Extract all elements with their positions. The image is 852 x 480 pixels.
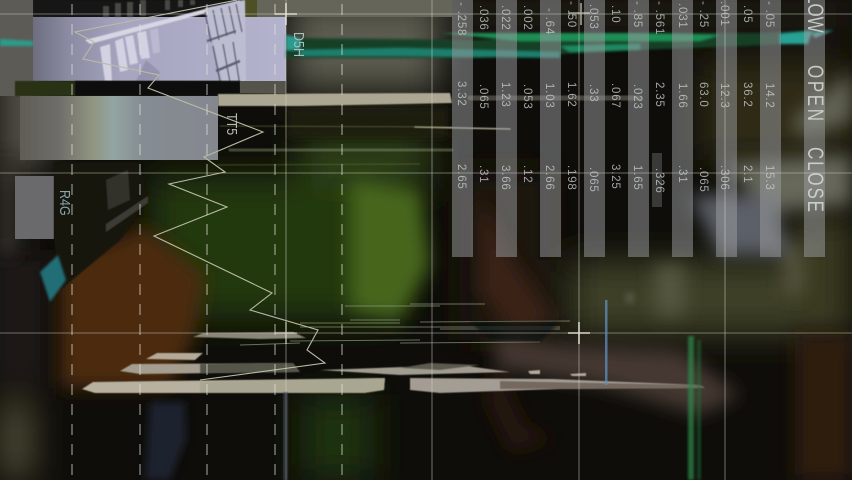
crosshair markers [275,3,590,344]
data table: rotated numeric values: 1.65 [631,165,643,191]
data table: rotated numeric values: 63.0 [697,82,709,108]
panel: small image tile R4G [15,176,54,239]
data table: column headings LOW OPEN CLOSE: CLOSE [802,147,827,212]
data table: rotated numeric values: .12 [521,165,533,183]
data table: rotated numeric values: .306 [718,165,730,191]
data table: rotated numeric values: .05 [741,5,753,23]
data table: rotated numeric values: - .561 [653,1,665,35]
data table: rotated numeric values: .065 [477,84,489,110]
data table: rotated numeric values: - .25 [697,1,709,28]
grid: dashed vertical lines [72,4,342,480]
data table: rotated numeric values: .31 [477,165,489,183]
data table: rotated numeric values: 12.3 [718,83,730,109]
vertical grey-blue streak [283,392,288,480]
beige horizontal bar [218,93,452,106]
data table: rotated numeric values: 36.2 [741,82,753,108]
data table: rotated numeric values: - .85 [631,1,643,28]
dark keyboard fragment [54,162,148,290]
tile label D5H: D5H [291,32,307,57]
data table: rotated numeric values: .053 [587,4,599,30]
data table: rotated numeric values: 14.2 [763,83,775,109]
data table: rotated numeric values: - .258 [455,2,467,36]
data table: rotated numeric values: 3.25 [609,164,621,190]
data table: rotated numeric values: .065 [697,167,709,193]
data table: rotated numeric values: .001 [718,1,730,27]
data table: vertical grey bars [452,0,825,257]
data table: rotated numeric values: 2.1 [741,165,753,183]
data table: rotated numeric values: .053 [521,84,533,110]
data table: rotated numeric values: 1.23 [499,82,511,108]
data table: rotated numeric values: - .05 [763,1,775,28]
data table: rotated numeric values: 2.35 [653,82,665,108]
data table: rotated numeric values: .023 [631,84,643,110]
data table: rotated numeric values: .022 [499,5,511,31]
vertical blue light streak [605,300,608,385]
keyboard slats [85,0,246,92]
dark strip behind streaks [470,322,560,342]
data table: rotated numeric values: .036 [477,5,489,31]
data table: rotated numeric values: - .64 [543,8,555,35]
data table: rotated numeric values: 2.65 [455,164,467,190]
data table: rotated numeric values: 3.66 [499,165,511,191]
vertical green light streaks [688,336,701,480]
tile label T5: TT5 [224,113,240,136]
bottom glitch bars [82,332,705,393]
data table: rotated numeric values: .002 [521,5,533,31]
data table: rotated numeric values: .31 [676,165,688,183]
scan streaks [240,304,570,345]
zigzag line chart [75,0,325,380]
grid: solid vertical lines [286,0,725,480]
data table: rotated numeric values: 1.03 [543,83,555,109]
data table: rotated numeric values: 1.66 [676,83,688,109]
top strip above panels [0,0,452,96]
data table: rotated numeric values: .326 [653,168,665,194]
panel: keyboard image tile D5H [33,0,286,92]
data table: rotated numeric values: .065 [587,167,599,193]
data table: rotated numeric values: - .50 [565,1,577,28]
data table: rotated numeric values: .198 [565,165,577,191]
teal blurred keyboard keys [40,255,66,302]
data table: rotated numeric values: .067 [609,83,621,109]
data table: rotated numeric values: .031 [676,3,688,29]
faint horizontal streaks [218,98,640,165]
panel: blurred image tile T5 [20,96,218,160]
data table: rotated numeric values: 1.62 [565,82,577,108]
cyan and green data ribbon [0,29,834,58]
data table: rotated numeric values: 2.66 [543,165,555,191]
data table: rotated numeric values [455,1,775,194]
tile label R4G: R4G [57,190,73,216]
data table: rotated numeric values: .10 [609,5,621,23]
data table: column headings LOW OPEN CLOSE [802,0,827,212]
data table: column headings LOW OPEN CLOSE: OPEN [802,65,827,121]
dark band between panels [15,81,286,96]
data table: rotated numeric values: 3.32 [455,81,467,107]
data table: rotated numeric values: .33 [587,84,599,102]
grid: horizontal lines [0,14,852,333]
data table: rotated numeric values: 15.3 [763,165,775,191]
